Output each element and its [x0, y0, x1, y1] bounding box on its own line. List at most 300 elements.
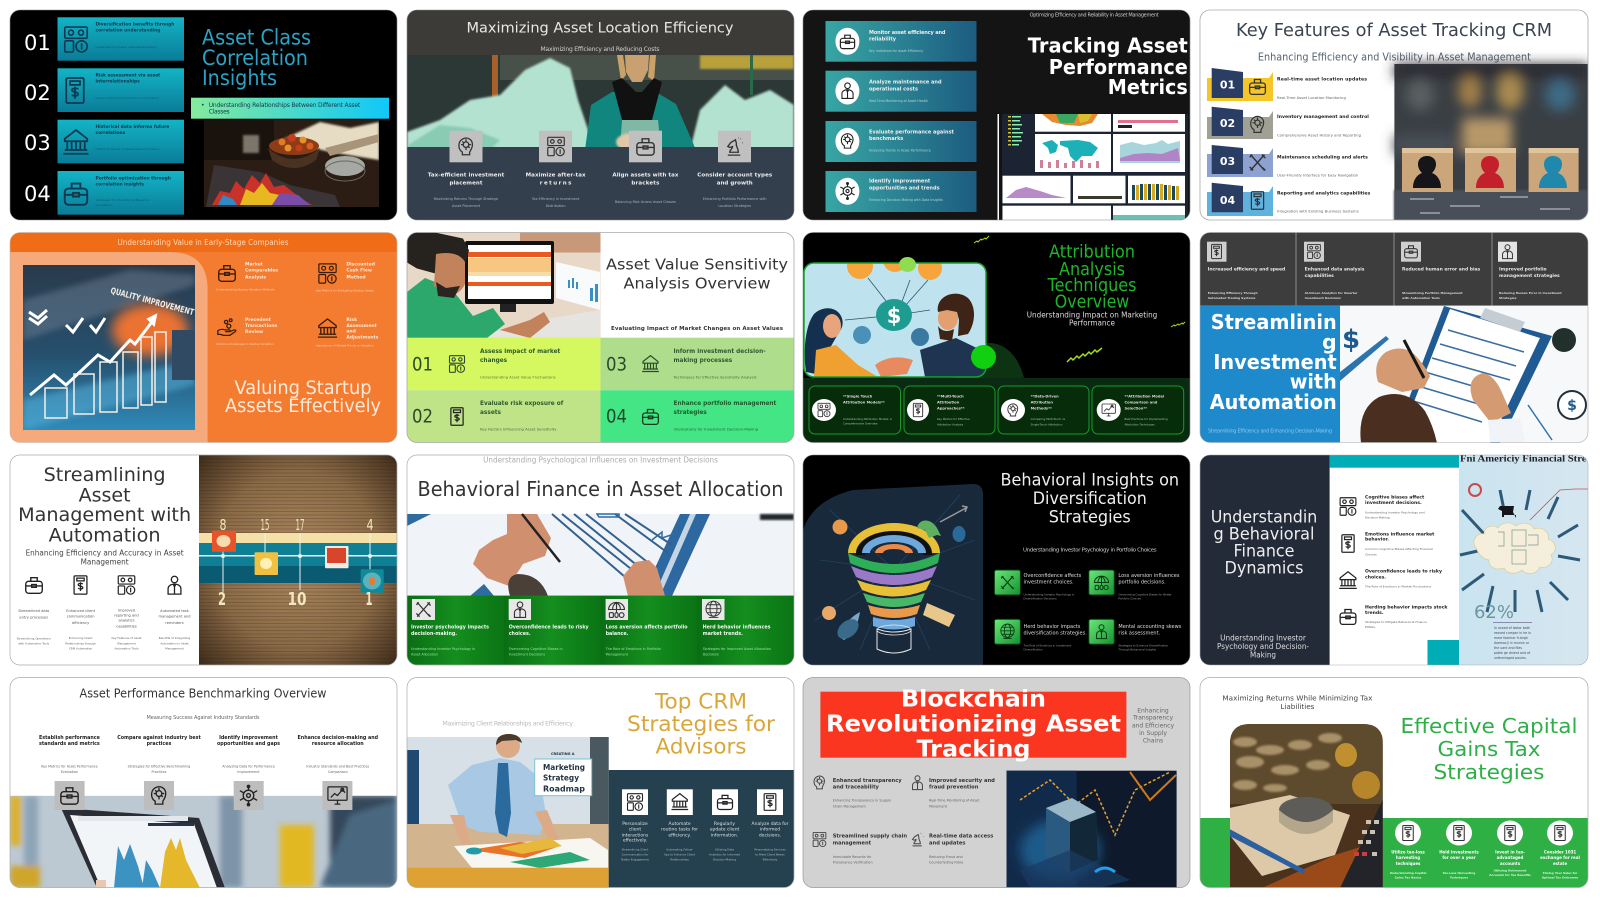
feature: data entry: with Automation Tools [18, 641, 50, 645]
feature: security: Real-Time Monitoring of Asset [929, 799, 980, 803]
method: risk assessment [316, 317, 379, 348]
green footer [1200, 818, 1588, 888]
strategy: automate: Relationships [670, 858, 689, 862]
title: Asset Class [202, 26, 311, 50]
item: overconfidence: choices. [1365, 574, 1386, 580]
panel: Streamlining Investment with Automation [1200, 232, 1588, 443]
panel: Behavioral Finance in Asset Allocation [407, 455, 794, 666]
illustration: two people with dollar [804, 248, 996, 377]
column: compare: Practices [152, 770, 167, 774]
column: standards: Establish performance [39, 735, 101, 741]
feature: data entry: Streamlined data [18, 609, 49, 613]
card 4: model comparison [1092, 386, 1184, 434]
title band [407, 10, 794, 55]
metric: benchmarks: benchmarks [869, 136, 903, 142]
feature 02: Comprehensive Asset History and Reporting [1277, 132, 1362, 137]
gold footer [407, 868, 609, 888]
item: emotions: behavior. [1365, 537, 1389, 543]
infographic image: unthenlaged pauies. [1494, 656, 1527, 660]
item 03: historical data: 03 [24, 131, 51, 155]
title: Diversification [1033, 489, 1147, 509]
quadrant 03: making processes [674, 358, 733, 364]
left title block [1200, 455, 1330, 665]
quadrant 04: 04 [606, 405, 627, 427]
side caption: Transparency [1132, 715, 1173, 722]
teal accents [1330, 455, 1459, 665]
quadrant 04: Enhance portfolio management [674, 401, 777, 407]
item 03: historical data: correlations [96, 130, 126, 136]
timeline image: 17 [296, 516, 304, 534]
column: decisions: resource allocation [312, 741, 364, 747]
column 1: tax-efficient placement: Asset Placement [452, 204, 481, 208]
title [606, 255, 788, 292]
method: risk assessment: Risk [346, 317, 358, 323]
column 4: account types: Location Strategies [718, 204, 751, 208]
strategy: 1031 exchange: estate [1553, 861, 1567, 866]
quadrant 02: Key Factors Influencing Asset Sensitivity [480, 427, 557, 432]
panel: Valuing Startup Assets Effectively [10, 232, 397, 442]
title: Valuing Startup [234, 377, 372, 399]
photo: man with roadmap: Marketing [543, 763, 585, 772]
column 1: tax-efficient placement [428, 131, 505, 208]
photo: quality improvement chart [23, 265, 195, 430]
title: Effective Capital [1400, 714, 1578, 738]
blue title panel: with [1290, 369, 1337, 393]
title: Behavioral Finance in Asset Allocation [418, 477, 784, 501]
title: Asset Value Sensitivity [606, 255, 788, 273]
benefits strip: Investment Decisions [1305, 296, 1341, 300]
subtitle: Management [81, 557, 129, 566]
panel: Understanding Behavioral Finance Dynamics [1200, 455, 1588, 665]
panel: Maximizing Asset Location Efficiency [407, 10, 794, 220]
photo: analyst at monitor [407, 232, 600, 338]
card 3: data driven: **Data-Driven [1031, 394, 1059, 398]
photo: tablet with charts [10, 796, 397, 888]
photo: calculator and coins [1230, 724, 1383, 888]
feature: task management [159, 576, 190, 651]
column 1: tax-efficient placement: Maximizing Returns Through Strategic [434, 197, 499, 201]
strategy: analyze: Analyze data for [752, 821, 789, 827]
feature: client communication: communication [67, 615, 94, 619]
column: standards: Key Metrics for Asset Performance [41, 764, 98, 768]
blue title panel: Investment [1213, 350, 1337, 374]
item 01: diversification: correlation understanding [96, 27, 160, 33]
feature: data entry: entry processes [19, 615, 48, 619]
strategy: advantaged accounts: Utilizing Retirement [1494, 869, 1527, 873]
quadrant 04 [600, 390, 794, 442]
strategy: advantaged accounts: Invest in tax- [1495, 849, 1525, 854]
benefits strip: Reducing Human Error in Investment [1499, 291, 1562, 295]
panel: Effective Capital Gains Tax Strategies [1200, 678, 1588, 888]
card 4: model comparison: Selection** [1124, 406, 1147, 410]
feature: supply chain: management [833, 841, 872, 847]
title: Asset Performance Benchmarking Overview [80, 685, 326, 700]
strategy: update: Regularly [714, 821, 735, 827]
feature 01 [1207, 68, 1367, 101]
item 01: diversification: 01 [24, 31, 51, 55]
strategy: 1031 exchange: exchange for real [1540, 855, 1580, 860]
column: compare: Compare against industry best [117, 735, 202, 741]
card 2: multi touch: Attribution [937, 400, 960, 404]
item: herding: Pitfalls. [1365, 625, 1376, 629]
item 01: diversification [24, 17, 184, 61]
feature: task management: management and [159, 615, 190, 619]
column 1: tax-efficient placement: Tax-efficient investment [428, 173, 505, 179]
benefits strip: management strategies [1499, 273, 1560, 279]
method: risk assessment: Importance of Market Trends in Valuation [316, 344, 374, 348]
insight: mental accounting: Strategies to Enhance Diversification [1118, 644, 1169, 648]
quadrant 01: changes [480, 358, 508, 364]
red title banner: Tracking [916, 737, 1030, 763]
item: cognitive biases: Cognitive biases affect [1365, 494, 1425, 500]
left title block: Finance [1234, 542, 1294, 562]
photo: signing clipboard: $ [1342, 325, 1360, 355]
title band: Maximizing Asset Location Efficiency [466, 20, 734, 36]
column: overconfidence: Overconfidence leads to risky [509, 624, 590, 630]
card 1: single touch: Attribution Models** [843, 400, 885, 404]
infographic image: doemoc(l in mursin or [1494, 641, 1530, 645]
feature 04: Integration with Existing Business Systems [1277, 209, 1359, 214]
card 1: single touch [809, 386, 900, 434]
card 3: data driven: Attribution [1031, 400, 1053, 404]
header bar: Understanding Value in Early-Stage Companies [118, 238, 289, 247]
title: Asset [79, 485, 131, 507]
insight: loss aversion: Loss aversion influences [1118, 573, 1180, 579]
left title block: Making [1250, 650, 1276, 659]
quadrant 03: Techniques for Effective Sensitivity Analysis [672, 375, 757, 380]
feature 03: User-Friendly Interface for Easy Navigation [1277, 172, 1359, 177]
feature: data entry: Streamlining Operations [17, 636, 51, 640]
column: overconfidence: Investment Decisions [509, 653, 545, 657]
column: herd behavior: Herd behavior influences [703, 624, 771, 630]
bottom band [407, 147, 794, 220]
insight: mental accounting [1089, 619, 1182, 652]
column: overconfidence [504, 596, 600, 666]
feature: security [913, 776, 995, 808]
title: Strategies [1049, 508, 1131, 528]
illustration: two people with dollar: $ [887, 304, 901, 328]
subtitle: Understanding Investor Psychology in Portfolio Choices [1023, 548, 1157, 554]
benefits strip: Enhancing Efficiency Through [1208, 291, 1258, 295]
benefits strip: Streamlining Portfolio Management [1402, 291, 1463, 295]
blue title panel: Streamlinin [1211, 310, 1337, 334]
card 2: multi touch: **Multi-Touch [937, 394, 964, 398]
photo: quality improvement chart: QUALITY IMPROVEMENT [109, 286, 195, 318]
feature: client communication [65, 576, 96, 651]
feature: supply chain: Provenance Verification [833, 860, 873, 864]
column: investor psychology: decision-making. [411, 631, 457, 637]
method: discounted cash flow [316, 262, 375, 293]
column: compare [117, 735, 202, 810]
column 4: account types: Consider account types [697, 173, 773, 179]
title: Advisors [656, 734, 746, 758]
panel: Attribution Analysis Techniques Overview [803, 232, 1190, 447]
quadrant 03 [600, 338, 794, 390]
photo: man with roadmap [407, 734, 609, 868]
column 4: account types: and growth [717, 180, 753, 186]
infographic image: poble ge dnient and of [1494, 651, 1531, 655]
side caption: in Supply [1139, 730, 1167, 737]
title [627, 689, 775, 758]
strategy: tax-loss: Utilize tax-loss [1391, 849, 1425, 854]
metric: benchmarks: Evaluate performance against [869, 129, 955, 135]
strategy: hold: Techniques [1450, 875, 1468, 879]
panel: Streamlining Asset Management with Automation [10, 455, 397, 665]
column 2: after-tax returns [526, 131, 586, 208]
benefits strip: capabilities [1305, 273, 1334, 279]
benefits strip: AI-Driven Analytics for Smarter [1305, 291, 1358, 295]
photo: worker with mint bags [407, 55, 794, 151]
feature: task management: Automation in Asset [160, 641, 190, 645]
insight: loss aversion [1089, 570, 1180, 600]
column 3: tax brackets: brackets [631, 180, 660, 186]
strategy: update: Analytics for Informed [709, 853, 740, 857]
column: investor psychology: Understanding Investor Psychology in [411, 647, 475, 651]
title [225, 377, 381, 417]
item 01: diversification: Understanding Asset Class Relationships [96, 45, 157, 49]
insight: herd behavior: diversification strategies. [1024, 630, 1087, 636]
column: overconfidence: choices. [509, 631, 531, 637]
blue title panel [1200, 306, 1340, 443]
subtitle: Understanding Impact on Marketing [1027, 311, 1157, 320]
method: precedent transactions: Review [245, 329, 263, 335]
column 1: tax-efficient placement: placement [450, 180, 483, 186]
strategy: personalize: Personalize [622, 821, 648, 827]
metric: improvement opportunities: Identify improvement [869, 179, 931, 185]
caption: Maximizing Client Relationships and Efficiency [442, 720, 573, 727]
item 04: portfolio optimization: Correlation [96, 203, 112, 207]
item 04: portfolio optimization [24, 171, 184, 215]
column: decisions: Comparison [328, 770, 348, 774]
feature: task management: Benefits of Integrating [159, 636, 190, 640]
column: herd behavior: Decisions [703, 653, 719, 657]
title: Analysis [1059, 260, 1125, 280]
method: precedent transactions: Transactions [245, 323, 277, 329]
column 3: tax brackets: Align assets with tax [612, 173, 679, 179]
feature: client communication: CRM Automation [69, 647, 93, 651]
red title banner: Blockchain [901, 687, 1046, 713]
panel: Asset Value Sensitivity Analysis Overview [407, 232, 794, 442]
strategy: analyze: decisions. [759, 833, 781, 839]
feature: transparency: Enhancing Transparency in Supply [833, 799, 891, 803]
feature 02 [1207, 107, 1369, 139]
card 2: multi touch: Attribution Analysis [937, 422, 964, 426]
item: emotions: Choices [1365, 552, 1377, 556]
title: Metrics [1108, 75, 1188, 99]
strategy: personalize: client [629, 827, 641, 833]
strategy: hold [1439, 820, 1479, 879]
left title block: Psychology and Decision- [1217, 642, 1309, 651]
title: Overview [1055, 293, 1129, 313]
photo: fruit bowl, book and chart [204, 120, 379, 207]
infographic image: reoved cumper in he in [1494, 631, 1531, 635]
method: discounted cash flow: Discounted [346, 262, 375, 268]
item 01: diversification: Diversification benefits through [96, 21, 174, 27]
panel: Asset Performance Benchmarking Overview [10, 678, 397, 888]
item: herding: trends. [1365, 610, 1384, 616]
panel: Behavioral Insights on Diversification Strategies [803, 455, 1190, 665]
strategy: tax-loss [1390, 820, 1426, 879]
timeline image: 4 [366, 516, 374, 534]
column: decisions: Enhance decision-making and [298, 735, 379, 741]
subtitle [26, 549, 184, 566]
item 04: portfolio optimization: 04 [24, 182, 51, 206]
photo: man with roadmap: Roadmap [543, 785, 585, 794]
metric: maintenance costs: operational costs [869, 87, 918, 93]
method: market comparables: Market [245, 262, 264, 268]
green footer [407, 596, 794, 666]
left title block: Understandin [1211, 508, 1317, 528]
column 2: after-tax returns: returns [540, 180, 572, 186]
column: standards: standards and metrics [39, 741, 100, 747]
column 2: after-tax returns: Maximize after-tax [526, 173, 586, 179]
insight: herd behavior: Diversification [1024, 648, 1043, 652]
side caption: and Efficiency [1132, 722, 1174, 729]
feature: task management: Management [165, 647, 185, 651]
method: precedent transactions: Common Challenges in Startup Valuation [216, 342, 274, 346]
feature 01: 01 [1220, 79, 1235, 92]
feature: reporting: Automation Tools [114, 647, 139, 651]
method: discounted cash flow: Cash Flow [346, 268, 372, 274]
left title block: g Behavioral [1214, 524, 1314, 544]
strategy: personalize: interactions [622, 833, 649, 839]
image frame [10, 252, 208, 442]
item: herding: Strategies to Mitigate Behavioral Finance [1365, 620, 1427, 624]
card 3: data driven: Comparing Multi-Touch vs [1031, 417, 1066, 421]
infographic image: Fni Americiy Financial Stre [1460, 455, 1586, 465]
metric: improvement opportunities: opportunities and trends [869, 185, 940, 191]
feature: real-time data: and updates [929, 841, 965, 847]
strategy: personalize: Better Engagement [621, 858, 650, 862]
feature: real-time data: Counterfeiting Risks [929, 860, 963, 864]
timeline image: 10 [288, 589, 306, 610]
quadrant 01: 01 [412, 353, 433, 375]
item: overconfidence: The Role of Emotions in Market Fluctuations [1364, 584, 1431, 588]
quadrant 02: assets [480, 410, 502, 416]
strategy: analyze: to Meet Client Needs [755, 853, 785, 857]
item: cognitive biases [1340, 494, 1425, 519]
column 2: after-tax returns: Tax Efficiency in Investment [531, 197, 580, 201]
item 02: risk assessment [24, 68, 184, 112]
infographic image [1459, 455, 1588, 665]
title: Tracking Asset [1028, 34, 1188, 58]
infographic image: more foonhar fr.lorgh [1494, 636, 1528, 640]
title: Performance [1049, 55, 1188, 79]
insight: overconfidence: Overconfidence affects [1024, 573, 1082, 579]
feature: real-time data [913, 833, 993, 864]
strategy: advantaged accounts: Accounts for Tax Benefits [1489, 873, 1531, 877]
strategy: analyze: informed [760, 827, 780, 833]
column 3: tax brackets [612, 131, 679, 204]
column: gaps [217, 735, 280, 810]
strategy: update: Decision-Making [713, 858, 736, 862]
subtitle [1027, 311, 1157, 328]
feature: reporting: reporting and [114, 614, 139, 618]
column: gaps: Improvement [237, 770, 260, 774]
strategy: automate [661, 789, 698, 862]
insight: loss aversion: portfolio decisions. [1118, 579, 1166, 585]
strategy: tax-loss: harvesting [1396, 855, 1420, 860]
subtitle: Measuring Success Against Industry Standards [146, 715, 260, 721]
item 03: historical data [24, 120, 184, 163]
card 1: single touch: **Single Touch [843, 394, 873, 398]
item: overconfidence: Overconfidence leads to risky [1365, 569, 1442, 575]
title: Streamlining [44, 464, 166, 486]
photo: glowing blockchain cube [1007, 771, 1177, 888]
strategy: 1031 exchange: Timing Your Sales for [1543, 871, 1578, 875]
photo: man with roadmap: CREATING A [551, 752, 575, 756]
dashboard edge [998, 114, 999, 220]
blue title panel: g [1322, 330, 1337, 354]
strategy: update: information. [711, 833, 738, 839]
dashboard screenshot [998, 114, 1190, 222]
feature: reporting: Management [117, 641, 137, 645]
method: precedent transactions: Precedent [245, 317, 272, 323]
metric: maintenance costs: Analyze maintenance and [869, 80, 942, 86]
card 2: multi touch: Key Metrics for Effective [937, 417, 970, 421]
strategy: advantaged accounts: accounts [1500, 861, 1521, 866]
feature: client communication: Enhanced client [66, 609, 96, 613]
infographic image: 62% [1474, 602, 1514, 623]
title: Correlation [202, 46, 308, 70]
metric: improvement opportunities [826, 171, 976, 212]
card 3: data driven: Single-Touch Attribution [1031, 422, 1063, 426]
timeline image: 8 [220, 516, 226, 534]
column: gaps: Identify improvement [219, 735, 279, 741]
strategy: 1031 exchange [1540, 820, 1580, 879]
insight: herd behavior [994, 619, 1087, 652]
quadrant 02: Evaluate risk exposure of [480, 401, 564, 407]
funnel illustration [803, 484, 983, 665]
feature: real-time data: Reducing Fraud and [929, 855, 963, 859]
column: overconfidence: Overcoming Cognitive Biases in [509, 647, 563, 651]
bottom strip [803, 378, 1190, 443]
strategy: 1031 exchange: Consider 1031 [1544, 849, 1576, 854]
photo: man with roadmap: Strategy [543, 774, 580, 783]
column 4: account types: Enhancing Portfolio Performance with [703, 197, 767, 201]
decorative zigzags [974, 236, 1185, 362]
column: gaps: Analyzing Data for Performance [222, 764, 275, 768]
infographic image: the uant and flies [1494, 646, 1522, 650]
title: Behavioral Insights on [1000, 470, 1179, 490]
title: Insights [202, 66, 277, 90]
title: Attribution [1049, 242, 1135, 262]
card 4: model comparison: Best Practices for Implementing [1124, 417, 1168, 421]
quadrant 02: 02 [412, 405, 433, 427]
metric: monitor efficiency [826, 21, 976, 62]
metric: monitor efficiency: Key Indicators for Asset Efficiency [869, 49, 923, 53]
strategy: automate: Automating Follow- [666, 848, 693, 852]
feature: client communication: efficiency [72, 621, 90, 625]
photo: signing clipboard: $ [1567, 398, 1577, 414]
column 2: after-tax returns: Distribution [546, 204, 565, 208]
benefits strip: with Automation Tools [1402, 296, 1440, 300]
feature: transparency: Enhanced transparency [833, 778, 902, 784]
column: investor psychology: Investor psychology impacts [411, 624, 489, 630]
strategy: analyze: Personalizing Services [754, 848, 786, 852]
strategy: tax-loss: techniques [1396, 861, 1421, 866]
strategy: personalize: effectively. [623, 838, 647, 844]
subtitle: Enhancing Efficiency and Visibility in Asset Management [1258, 52, 1531, 64]
feature: reporting [111, 576, 142, 651]
metric: monitor efficiency: Monitor asset efficiency and [869, 30, 946, 36]
title: Gains Tax [1438, 737, 1541, 761]
method: discounted cash flow: Key Metrics for Evaluating Startup Assets [316, 289, 374, 293]
column: loss aversion: Loss aversion affects portfolio [606, 624, 688, 630]
metric: benchmarks [826, 121, 976, 162]
method: risk assessment: Adjustments [346, 334, 379, 340]
feature: task management: Automated task [160, 609, 190, 613]
